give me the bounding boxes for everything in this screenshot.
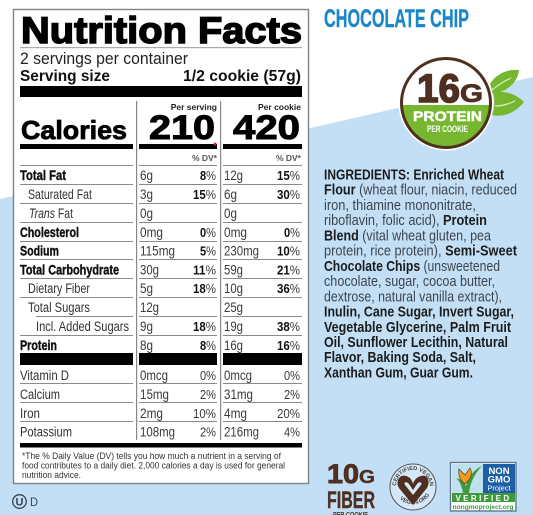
icon: non-GMO project verified: NON	[488, 466, 510, 477]
row: Vitamin D: Vitamin D	[20, 368, 69, 383]
row: Sodium: 230mg	[224, 244, 259, 258]
calories row: Calories	[21, 115, 127, 145]
footnote: food contributes to a daily diet. 2,000 calories a day is used for general	[22, 460, 285, 470]
row: Iron	[20, 406, 300, 421]
footnote: *The % Daily Value (DV) tells you how much a nutrient in a serving of	[22, 451, 281, 461]
row: Total Fat: 6g	[140, 168, 153, 183]
row: Cholesterol: Cholesterol	[20, 225, 79, 240]
row: Cholesterol	[20, 225, 300, 240]
row: Potassium: 2%	[200, 424, 216, 440]
row: Calcium: 2%	[284, 387, 300, 402]
calories row: Per serving	[171, 102, 217, 112]
row: Calcium: Calcium	[20, 387, 60, 402]
calories row: % DV*	[192, 153, 218, 163]
icon: non-GMO project verified: GMO	[488, 474, 510, 486]
row: Saturated Fat: 3g	[140, 187, 153, 202]
row: Potassium	[20, 424, 300, 440]
footnote	[22, 451, 285, 480]
row: Total Fat: Total Fat	[20, 168, 66, 183]
row: Iron: Iron	[20, 406, 40, 421]
row: Iron: 4mg	[224, 406, 247, 421]
row: Trans Fat: 0g	[224, 206, 237, 221]
row: Total Sugars: Total Sugars	[28, 300, 90, 315]
text block: ingredients: Flavor, Baking Soda, Salt,	[324, 349, 476, 366]
row: Total Carbohydrate	[20, 262, 300, 278]
row: Total Fat: 8%	[200, 168, 216, 183]
icon: kosher dairy mark: U	[16, 496, 24, 508]
row: Incl. Added Sugars: Incl. Added Sugars	[36, 319, 129, 334]
row: Saturated Fat: 15%	[193, 187, 216, 202]
row: Total Carbohydrate: 21%	[277, 262, 300, 278]
row: Sodium: 115mg	[140, 244, 175, 258]
row: Total Sugars	[28, 300, 243, 315]
row: Saturated Fat: 30%	[277, 187, 300, 202]
row: Protein: Protein	[20, 338, 57, 353]
row: Potassium: 4%	[284, 424, 300, 440]
row: Saturated Fat	[28, 187, 300, 202]
calories row	[20, 102, 302, 163]
row: Potassium: 108mg	[140, 424, 175, 440]
row: Cholesterol: 0%	[284, 225, 300, 240]
text block: ingredients: Xanthan Gum, Guar Gum.	[324, 364, 473, 382]
row: Sodium: 5%	[200, 244, 216, 258]
row: Trans Fat: 0g	[140, 206, 153, 221]
row: Saturated Fat: 6g	[224, 187, 237, 202]
row: Sodium: Sodium	[20, 244, 59, 258]
row: Incl. Added Sugars: 38%	[277, 319, 300, 334]
row: Vitamin D: 0mcg	[224, 368, 252, 383]
row: Protein: 16%	[277, 338, 300, 353]
icon: kosher dairy mark	[13, 495, 38, 509]
row: Dietary Fiber: 18%	[193, 281, 216, 296]
row: Total Carbohydrate: 30g	[140, 262, 159, 278]
row: Iron: 20%	[277, 406, 300, 421]
row: Total Fat: 12g	[224, 168, 243, 183]
row: Calcium	[20, 387, 300, 402]
text block: ingredients: iron, thiamine mononitrate,	[324, 197, 476, 214]
row: Protein: 8%	[200, 338, 216, 353]
leaves	[490, 70, 524, 116]
icon: 10g fiber: 10	[327, 459, 359, 489]
row: Dietary Fiber: 10g	[224, 281, 243, 296]
icon: 16g protein badge: PROTEIN	[413, 108, 482, 124]
row: Total Sugars: 25g	[224, 300, 243, 315]
calories row: 420	[233, 109, 300, 147]
icon: 16g protein badge: G	[460, 80, 483, 108]
row: Total Sugars: 12g	[140, 300, 159, 315]
row: Cholesterol: 0mg	[140, 225, 163, 240]
row: Vitamin D: 0mcg	[140, 368, 168, 383]
row: Total Fat	[20, 168, 300, 183]
icon: 10g fiber	[327, 459, 375, 515]
icon: certified vegan: VEGAN.ORG	[400, 493, 429, 504]
calories row: Per cookie	[258, 102, 301, 112]
icon: non-GMO project verified: VERIFIED	[455, 494, 512, 503]
footnote: nutrition advice.	[22, 470, 81, 480]
text: servings per container: 2 servings per container	[20, 49, 188, 68]
row: Iron: 2mg	[140, 406, 163, 421]
text block: ingredients	[324, 166, 517, 382]
text block: ingredients: Blend (vital wheat gluten, pea	[324, 228, 492, 244]
row: Potassium: Potassium	[20, 424, 72, 440]
row: Incl. Added Sugars: 19g	[224, 319, 243, 334]
text block: ingredients: riboflavin, folic acid), Protein	[324, 212, 487, 229]
row: Protein: 16g	[224, 338, 243, 353]
row: Protein: 8g	[140, 338, 153, 353]
row: Vitamin D	[20, 368, 300, 383]
text block: ingredients: chocolate, sugar, cocoa butter,	[324, 273, 495, 290]
row: Cholesterol: 0%	[200, 225, 216, 240]
icon: kosher dairy mark: D	[30, 495, 38, 509]
text block: ingredients: protein, rice protein), Semi-Sweet	[324, 243, 517, 260]
row: Dietary Fiber: 5g	[140, 281, 153, 296]
icon: non-GMO project verified: nongmoproject.org	[452, 504, 514, 511]
row: Saturated Fat: Saturated Fat	[28, 187, 92, 202]
row: Incl. Added Sugars: 18%	[193, 319, 216, 334]
icon: 10g fiber: FIBER	[327, 487, 375, 514]
row: Cholesterol: 0mg	[224, 225, 247, 240]
row: Vitamin D: 0%	[284, 368, 300, 383]
row: Dietary Fiber	[28, 281, 300, 296]
row: Sodium	[20, 244, 300, 258]
icon: non-GMO project verified: Project	[487, 484, 512, 492]
text: serving size: 1/2 cookie (57g)	[183, 68, 301, 85]
row: Trans Fat: Trans Fat	[29, 206, 73, 221]
row: Calcium: 15mg	[140, 387, 169, 402]
icon: 16g protein badge: PER COOKIE	[427, 124, 468, 134]
row: Incl. Added Sugars: 9g	[140, 319, 153, 334]
icon: 10g fiber: G	[359, 467, 375, 487]
calories row: 210	[149, 109, 215, 147]
icon: non-GMO project verified	[450, 462, 516, 511]
row: Incl. Added Sugars	[36, 319, 300, 334]
row: Total Carbohydrate: 11%	[193, 262, 216, 278]
heading: Nutrition Facts: Nutrition Facts	[21, 10, 302, 51]
row: Trans Fat	[29, 206, 237, 221]
row: Iron: 10%	[193, 406, 216, 421]
text: serving size	[20, 68, 301, 85]
icon: certified vegan	[390, 464, 436, 510]
row: Total Fat: 15%	[277, 168, 300, 183]
row: Sodium: 10%	[277, 244, 300, 258]
row: Total Carbohydrate: Total Carbohydrate	[20, 262, 119, 278]
icon: 16g protein badge: 16	[417, 67, 460, 111]
icon: 16g protein badge	[398, 56, 524, 150]
row: Dietary Fiber: 36%	[277, 281, 300, 296]
row: Vitamin D: 0%	[200, 368, 216, 383]
row: Calcium: 31mg	[224, 387, 253, 402]
row: Protein	[20, 338, 300, 353]
row: Potassium: 216mg	[224, 424, 259, 440]
row: Calcium: 2%	[200, 387, 216, 402]
calories row: % DV*	[276, 153, 302, 163]
icon: certified vegan: CERTIFIED VEGAN	[392, 466, 434, 486]
text block: ingredients: Chocolate Chips (unsweetened	[324, 258, 500, 275]
text: serving size: Serving size	[20, 68, 110, 85]
row: Total Carbohydrate: 59g	[224, 262, 243, 278]
panel: nutrition facts label	[14, 10, 308, 484]
row: Dietary Fiber: Dietary Fiber	[28, 281, 90, 296]
